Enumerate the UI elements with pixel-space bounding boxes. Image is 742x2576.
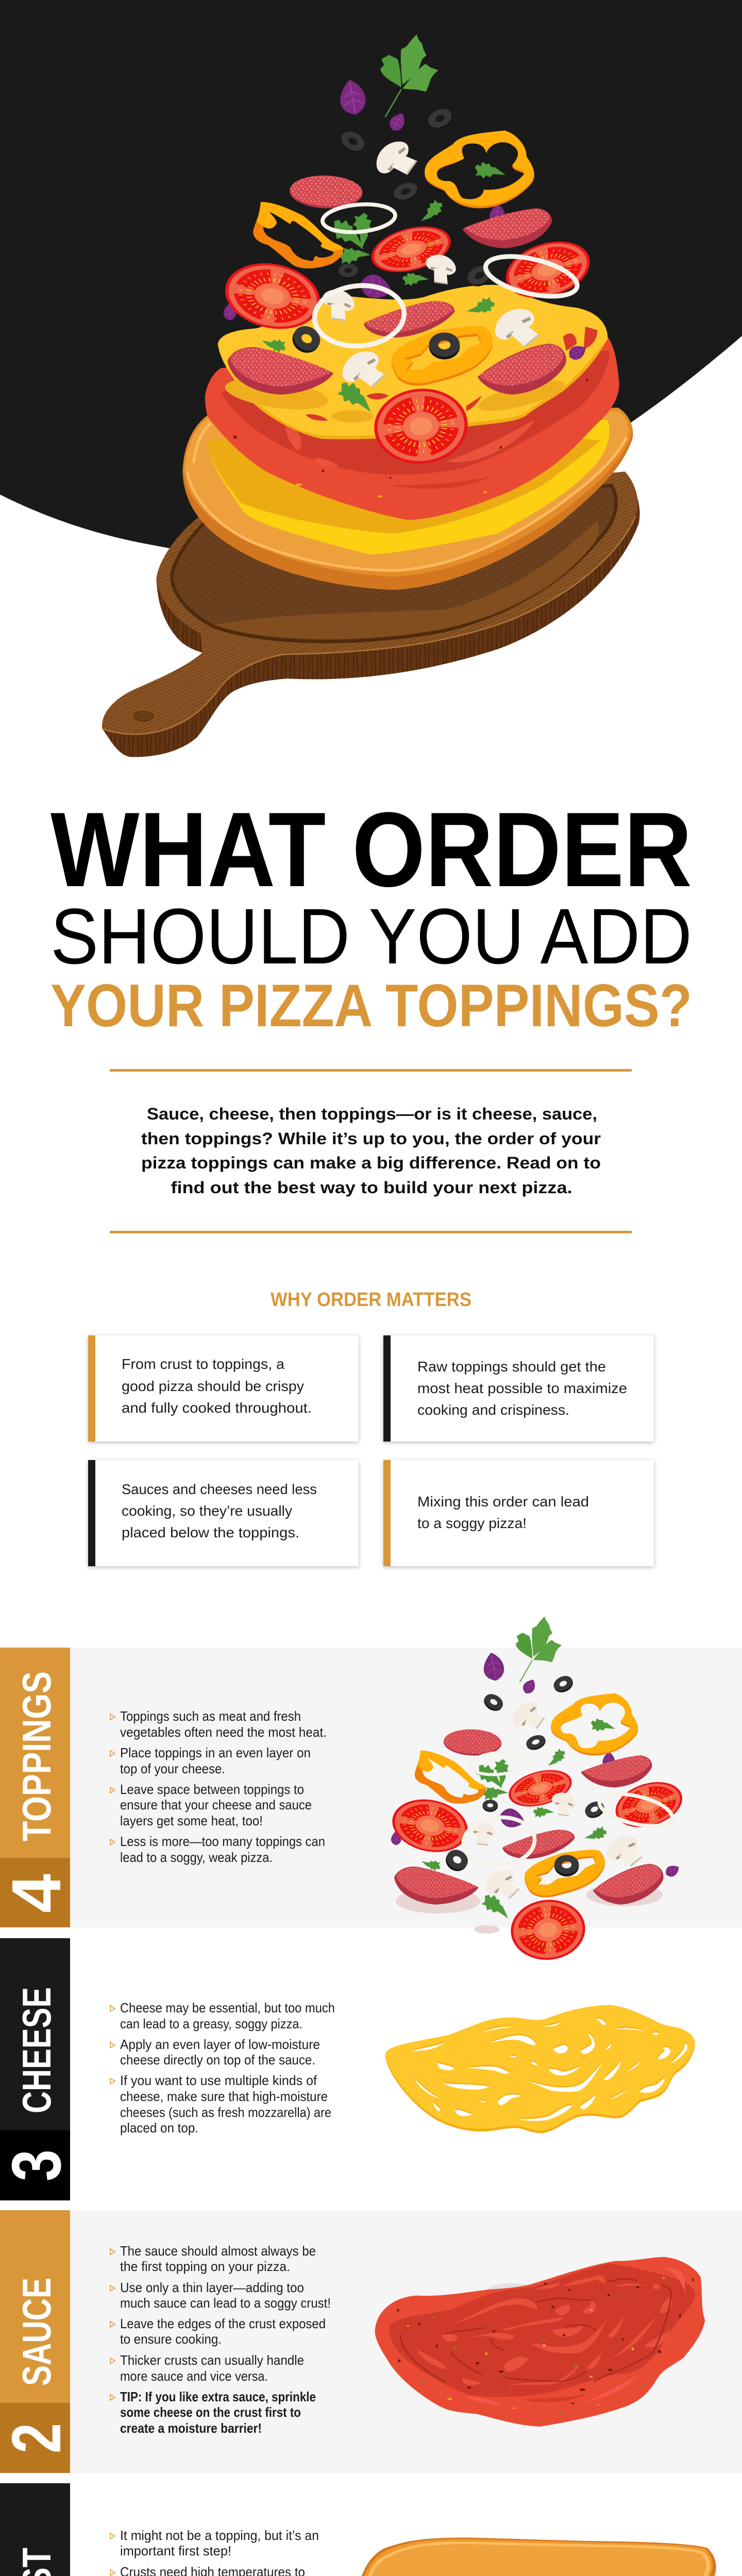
- bullets: crust: It might not be a topping, but it’s an: [120, 2528, 319, 2543]
- bullets: toppings: Toppings such as meat and fresh: [120, 1708, 301, 1724]
- intro paragraph: pizza toppings can make a big difference. Read on to: [141, 1154, 601, 1172]
- bullets: cheese: Apply an even layer of low-moisture: [120, 2037, 320, 2052]
- card: raw toppings: Raw toppings should get the: [417, 1359, 606, 1375]
- bullets: sauce: much sauce can lead to a soggy crust!: [120, 2295, 331, 2311]
- bullets: sauce: more sauce and vice versa.: [120, 2368, 268, 2384]
- bell peppers: [253, 130, 534, 268]
- tab: 3 cheese: CHEESE: [14, 1987, 59, 2113]
- card: raw toppings: [383, 1335, 654, 1442]
- tab: 2 sauce: [0, 2210, 75, 2473]
- bullets: toppings: lead to a soggy, weak pizza.: [120, 1850, 273, 1865]
- onion rings: [312, 201, 581, 350]
- intro paragraph: find out the best way to build your next pizza.: [171, 1178, 572, 1197]
- panel: sauce: [0, 2210, 742, 2473]
- tab: 4 toppings: TOPPINGS: [14, 1671, 59, 1841]
- bullets: toppings: Less is more—too many toppings can: [120, 1834, 325, 1849]
- bullets: sauce: Use only a thin layer—adding too: [120, 2280, 304, 2295]
- bullets: sauce: Thicker crusts can usually handle: [120, 2352, 304, 2368]
- bullets: cheese: placed on top.: [120, 2120, 198, 2136]
- tomato slices: [219, 218, 597, 337]
- bullets: cheese: cheese, make sure that high-moisture: [120, 2089, 328, 2104]
- bullets: sauce: the first topping on your pizza.: [120, 2259, 290, 2274]
- sauce layer: [205, 330, 619, 520]
- bullets: cheese: [110, 2000, 335, 2136]
- illustration: crust layer: [357, 2537, 716, 2576]
- intro paragraph: then toppings? While it’s up to you, the order of your: [141, 1129, 601, 1148]
- bullets: sauce: TIP: If you like extra sauce, sprinkle: [120, 2389, 316, 2404]
- bullets: toppings: [110, 1708, 327, 1865]
- wooden board: [102, 471, 640, 757]
- bullets: cheese: can lead to a greasy, soggy pizza.: [120, 2016, 302, 2031]
- tab: 2 sauce: SAUCE: [14, 2278, 59, 2386]
- falling toppings: [219, 35, 597, 468]
- bullets: cheese: Cheese may be essential, but too much: [120, 2000, 335, 2015]
- card: sauces and cheeses: Sauces and cheeses need less: [122, 1481, 317, 1497]
- pepper ring on cheese: [392, 326, 493, 386]
- card: mixing order: Mixing this order can lead: [417, 1494, 589, 1510]
- hero background: [0, 0, 742, 558]
- crust layer: [182, 408, 633, 590]
- why order matters heading: WHY ORDER MATTERS: [271, 1289, 471, 1311]
- bottom tomato: [371, 385, 471, 468]
- hero pizza illustration: [102, 35, 640, 757]
- bullets: cheese: cheeses (such as fresh mozzarella) are: [120, 2105, 331, 2120]
- parsley sprig: [380, 35, 438, 117]
- bullets: crust: important first step!: [120, 2543, 231, 2558]
- olives on cheese: [288, 321, 460, 360]
- intro paragraph: [141, 1105, 601, 1197]
- illustration: sauce layer: [375, 2257, 705, 2427]
- card: raw toppings: cooking and crispiness.: [417, 1402, 569, 1418]
- panel: why order matters cards: [88, 1335, 654, 1566]
- mushroom slices, upper: [377, 142, 462, 290]
- intro block: [110, 1069, 632, 1233]
- front basil leaves: [358, 272, 589, 363]
- bullets: toppings: vegetables often need the most heat.: [120, 1724, 327, 1740]
- card: crust to toppings: From crust to toppings, a: [122, 1356, 284, 1372]
- bullets: sauce: Leave the edges of the crust exposed: [120, 2316, 326, 2331]
- illustration: cheese layer: [385, 2005, 695, 2133]
- title: [50, 790, 692, 1039]
- card: mixing order: [383, 1460, 654, 1566]
- olives: [337, 105, 495, 290]
- purple basil leaves: [224, 78, 505, 320]
- tab: 3 cheese: [0, 1938, 75, 2200]
- bullets: sauce: some cheese on the crust first to: [120, 2404, 301, 2420]
- bullets: toppings: ensure that your cheese and sauce: [120, 1797, 312, 1812]
- card: crust to toppings: and fully cooked throughout.: [122, 1400, 312, 1416]
- bullets: sauce: The sauce should almost always be: [120, 2243, 316, 2259]
- more mushrooms on cheese: [319, 283, 545, 389]
- cheese layer: [218, 285, 608, 439]
- bullets: sauce: to ensure cooking.: [120, 2331, 222, 2347]
- bullets: sauce: [110, 2243, 331, 2436]
- card: crust to toppings: [88, 1335, 359, 1442]
- title line 2: SHOULD YOU ADD: [50, 892, 692, 980]
- bullets: sauce: create a moisture barrier!: [120, 2420, 262, 2436]
- bullets: toppings: layers get some heat, too!: [120, 1813, 263, 1828]
- card: sauces and cheeses: [88, 1460, 359, 1566]
- bullets: toppings: Leave space between toppings to: [120, 1782, 304, 1797]
- illustration: toppings: [387, 1616, 688, 1963]
- bullets: toppings: Place toppings in an even layer on: [120, 1745, 311, 1760]
- bullets: cheese: cheese directly on top of the sauce.: [120, 2052, 315, 2067]
- panel: toppings: [0, 1616, 742, 1963]
- panel: crust: [0, 2483, 716, 2576]
- tab: 1 crust: [0, 2483, 75, 2576]
- card: raw toppings: most heat possible to maximize: [417, 1380, 627, 1396]
- card: sauces and cheeses: cooking, so they’re usually: [122, 1503, 292, 1519]
- card: crust to toppings: good pizza should be crispy: [122, 1378, 304, 1394]
- card: sauces and cheeses: placed below the toppings.: [122, 1524, 299, 1540]
- salami slices: [228, 174, 566, 395]
- bullets: crust: [110, 2528, 321, 2576]
- bullets: toppings: top of your cheese.: [120, 1761, 225, 1776]
- bullets: cheese: If you want to use multiple kinds of: [120, 2073, 317, 2088]
- panel: cheese: [0, 1938, 695, 2200]
- card: mixing order: to a soggy pizza!: [417, 1515, 527, 1531]
- tab: 4 toppings: [0, 1648, 75, 1927]
- sprigs on cheese: [261, 294, 497, 416]
- intro paragraph: Sauce, cheese, then toppings—or is it cheese, sauce,: [147, 1105, 597, 1123]
